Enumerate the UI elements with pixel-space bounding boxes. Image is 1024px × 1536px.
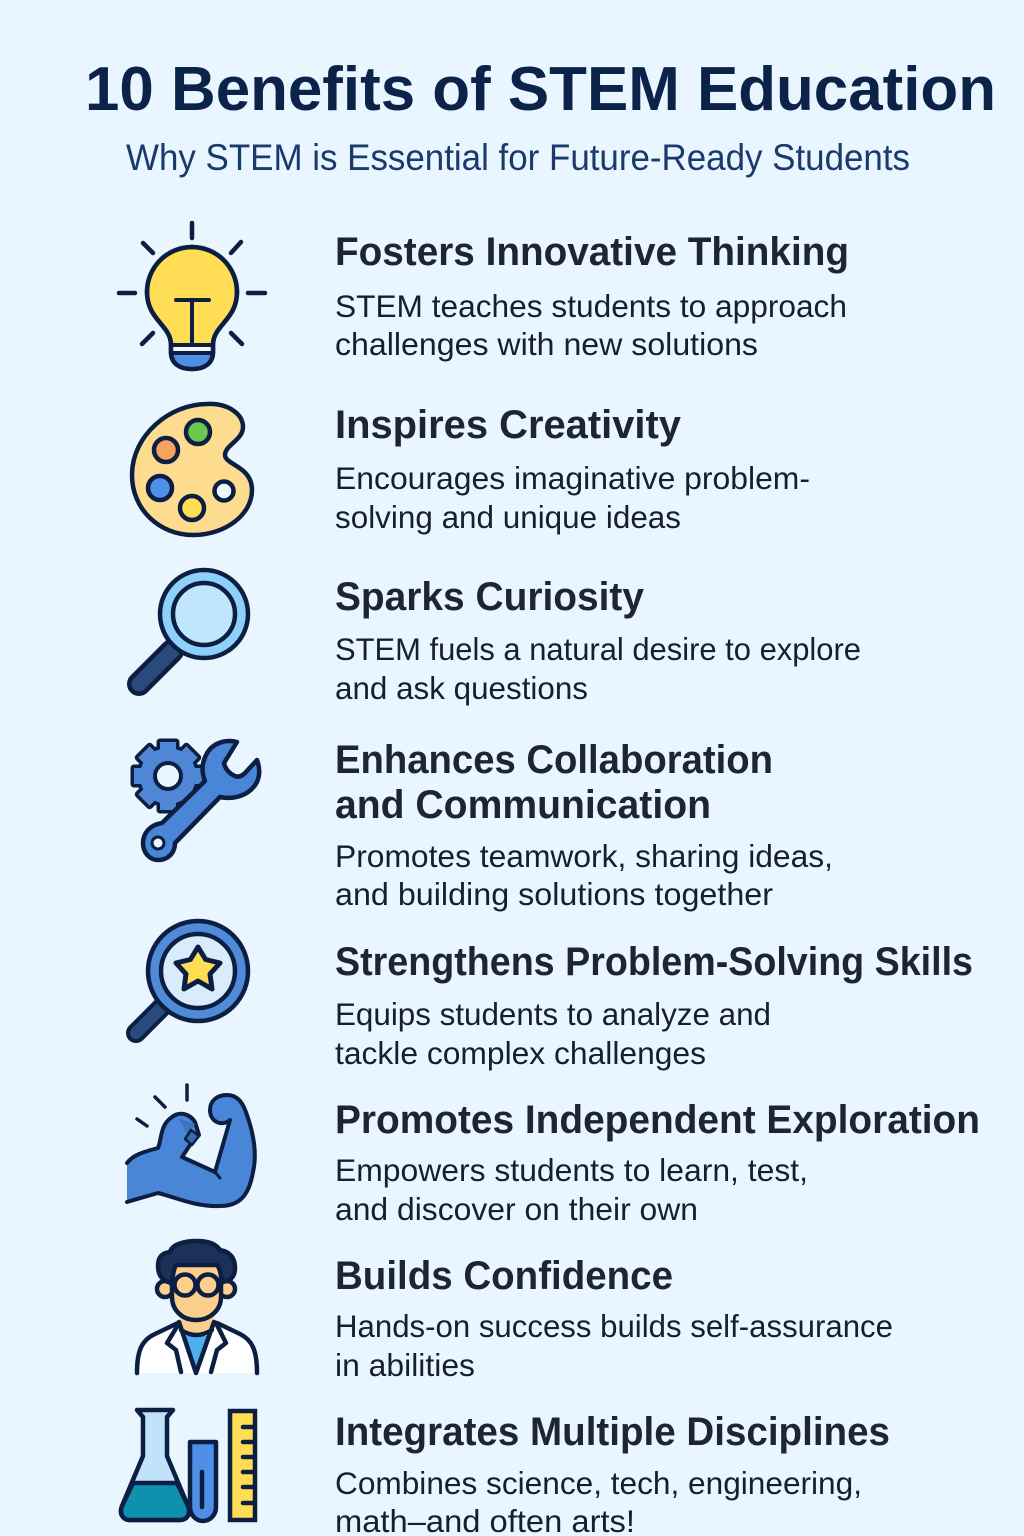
description: Empowers students to learn, test, xyxy=(335,1152,808,1188)
description: and discover on their own xyxy=(335,1191,698,1227)
icon: flexed arm xyxy=(127,1085,255,1206)
icon: scientist xyxy=(137,1241,257,1373)
heading: Integrates Multiple Disciplines xyxy=(335,1410,890,1454)
subtitle: Why STEM is Essential for Future-Ready Students xyxy=(126,137,910,178)
description: and building solutions together xyxy=(335,876,773,912)
description xyxy=(335,460,810,535)
description: Encourages imaginative problem- xyxy=(335,460,810,496)
heading: Fosters Innovative Thinking xyxy=(335,230,849,274)
description xyxy=(335,1465,862,1536)
heading xyxy=(335,738,773,827)
description: STEM fuels a natural desire to explore xyxy=(335,631,861,667)
benefit 2: inspires creativity xyxy=(132,403,810,535)
benefit 3: sparks curiosity xyxy=(139,570,861,706)
description: STEM teaches students to approach xyxy=(335,288,847,324)
heading: Builds Confidence xyxy=(335,1254,673,1298)
description: Hands-on success builds self-assurance xyxy=(335,1308,893,1344)
heading: Strengthens Problem-Solving Skills xyxy=(335,940,973,984)
description xyxy=(335,288,847,362)
benefit 6: promotes independent exploration xyxy=(127,1085,980,1227)
heading: Promotes Independent Exploration xyxy=(335,1098,980,1142)
description: Equips students to analyze and xyxy=(335,996,771,1032)
icon: paint palette xyxy=(132,404,252,535)
benefit 8: integrates multiple disciplines xyxy=(121,1410,890,1536)
benefit 5: strengthens problem-solving skills xyxy=(136,921,973,1071)
description xyxy=(335,1308,893,1383)
description xyxy=(335,1152,808,1227)
description: challenges with new solutions xyxy=(335,326,758,362)
heading: Inspires Creativity xyxy=(335,403,681,447)
description xyxy=(335,631,861,706)
benefit 1: fosters innovative thinking xyxy=(119,223,849,369)
description: tackle complex challenges xyxy=(335,1035,706,1071)
title: 10 Benefits of STEM Education xyxy=(85,55,996,124)
description xyxy=(335,996,771,1071)
description: solving and unique ideas xyxy=(335,499,681,535)
icon: magnifier with star xyxy=(136,921,248,1033)
description xyxy=(335,838,833,912)
heading: and Communication xyxy=(335,783,711,827)
benefit 7: builds confidence xyxy=(137,1241,893,1383)
heading: Sparks Curiosity xyxy=(335,575,644,619)
heading: Enhances Collaboration xyxy=(335,738,773,782)
description: and ask questions xyxy=(335,670,588,706)
description: in abilities xyxy=(335,1347,475,1383)
icon: flask, test tube and ruler xyxy=(121,1410,255,1521)
icon: light bulb xyxy=(119,223,265,369)
benefit 4: enhances collaboration and communication xyxy=(134,738,833,912)
icon: magnifying glass xyxy=(139,570,248,684)
description: Promotes teamwork, sharing ideas, xyxy=(335,838,833,874)
description: Combines science, tech, engineering, xyxy=(335,1465,862,1501)
icon: gear and wrench xyxy=(134,741,259,860)
